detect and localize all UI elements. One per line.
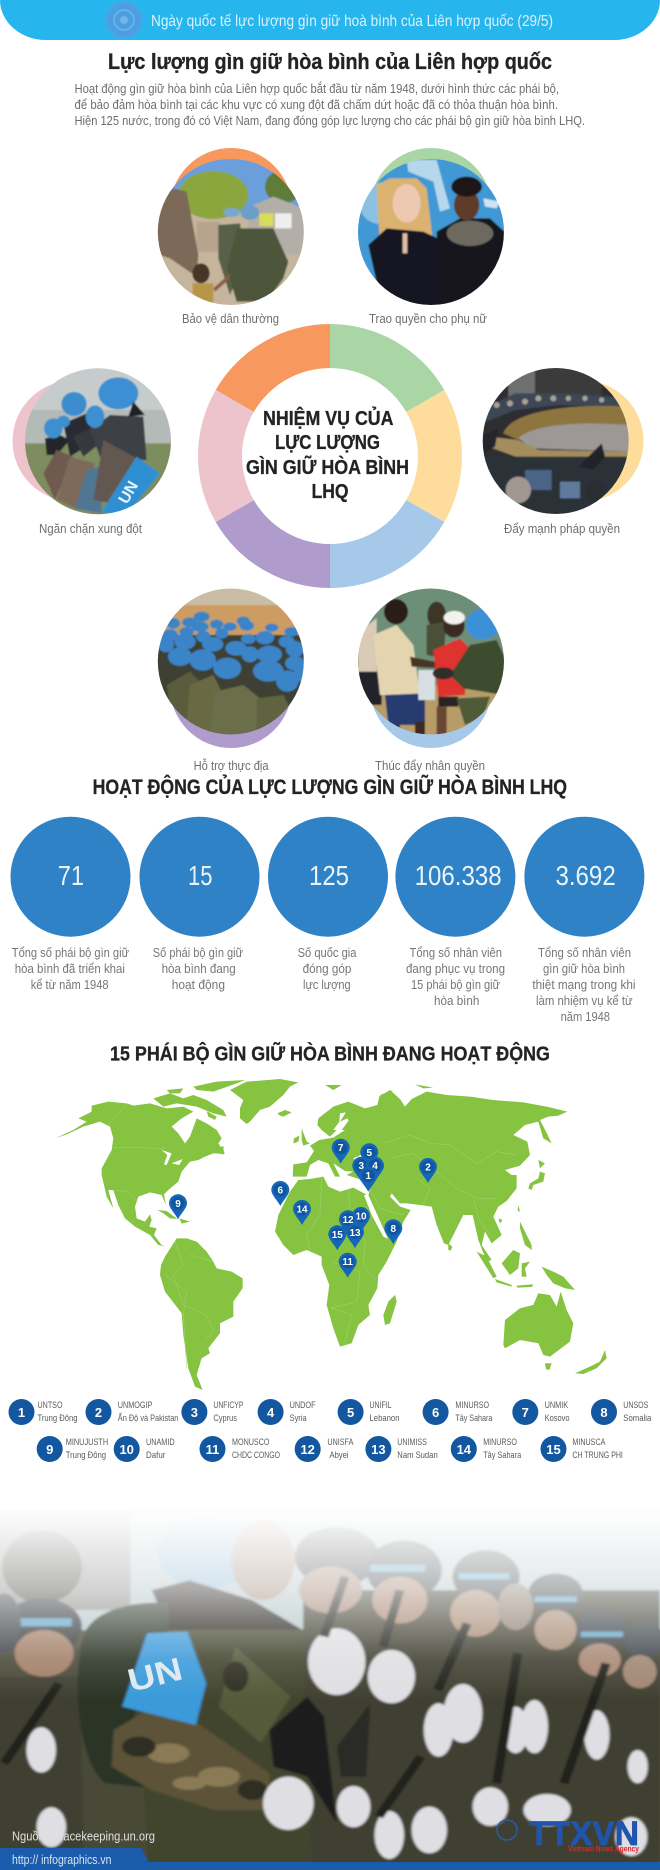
- stat: 3.692 fallen: làm nhiệm vụ kể từ: [536, 993, 633, 1008]
- photo: empower women: [358, 148, 504, 326]
- pin 15: [328, 1225, 346, 1250]
- intro text: [74, 81, 585, 128]
- pin 2: 2: [425, 1162, 431, 1174]
- legend item 13: UNIMISS: [397, 1437, 427, 1448]
- legend item 13: [365, 1436, 438, 1462]
- pin 5: 5: [367, 1148, 373, 1159]
- stat: 106.338 staff: Tổng số nhân viên: [410, 945, 502, 960]
- pin 3: [352, 1157, 370, 1182]
- legend item 5: [338, 1399, 400, 1425]
- legend item 3: [181, 1399, 243, 1425]
- pin 10: 10: [355, 1212, 367, 1222]
- white fade over photo: [0, 1495, 660, 1705]
- pin 1: [359, 1167, 377, 1192]
- legend item 15: MINUSCA: [572, 1437, 606, 1448]
- stat: 71 missions: Tổng số phái bộ gìn giữ: [12, 945, 129, 960]
- legend item 2: 2: [95, 1405, 102, 1420]
- stat: 15 active: hoạt động: [172, 977, 225, 992]
- caption: Hỗ trợ thực địa: [194, 758, 269, 773]
- pin 3: 3: [359, 1161, 365, 1172]
- map pins: [169, 1139, 437, 1278]
- legend item 8: UNSOS: [623, 1400, 648, 1411]
- legend item 13: 13: [371, 1442, 386, 1457]
- footer bar: [0, 1848, 660, 1870]
- stat: 15 active: hòa bình đang: [162, 961, 236, 976]
- legend item 3: 3: [191, 1405, 198, 1420]
- pin 14: 14: [296, 1204, 308, 1216]
- legend item 6: MINURSO: [455, 1400, 489, 1411]
- stat: 106.338 staff: 106.338: [415, 860, 502, 891]
- heading: activities: HOẠT ĐỘNG CỦA LỰC LƯỢNG GÌN GIỮ HÒA BÌNH LHQ: [93, 775, 567, 799]
- legend item 7: 7: [522, 1405, 529, 1420]
- legend item 8: 8: [600, 1405, 608, 1420]
- legend item 9: MINUJUSTH: [66, 1437, 108, 1448]
- world map: [55, 1079, 607, 1390]
- pin 6: 6: [278, 1186, 284, 1196]
- pin 7: 7: [338, 1143, 344, 1154]
- pin 14: [293, 1200, 311, 1225]
- pin 5: [360, 1143, 378, 1168]
- pin 8: 8: [391, 1224, 397, 1235]
- pin 8: [384, 1219, 402, 1244]
- logo: TTXVN: TTXVN: [529, 1815, 639, 1853]
- stat: 15 active: 15: [188, 860, 212, 891]
- photo: rule of law: [475, 360, 644, 536]
- stat: 125 countries: đóng góp: [303, 961, 351, 976]
- legend item 10: [114, 1436, 175, 1462]
- stat: 3.692 fallen: gìn giữ hòa bình: [543, 961, 625, 976]
- legend item 7: UNMIK: [545, 1400, 569, 1411]
- legend item 11: MONUSCO: [232, 1437, 270, 1448]
- photo: prevent conflict: UN: [116, 478, 142, 507]
- header banner: [0, 0, 660, 40]
- intro text: Hiện 125 nước, trong đó có Việt Nam, đang đóng góp lực lượng cho các phái bộ gìn giữ hòa bình LHQ.: [74, 113, 585, 128]
- legend item 5: UNIFIL: [370, 1400, 392, 1411]
- stat: 71 missions: hòa bình đã triển khai: [15, 961, 125, 976]
- stat: 125 countries: Số quốc gia: [298, 945, 357, 960]
- legend item 5: 5: [347, 1405, 354, 1420]
- donut centre text: LỰC LƯỢNG: [275, 432, 380, 454]
- stat: 106.338 staff: đang phục vụ trong: [406, 961, 505, 976]
- legend item 4: [258, 1399, 316, 1425]
- legend item 15: [540, 1436, 623, 1462]
- pin 15: 15: [332, 1230, 343, 1241]
- photo: marching peacekeepers: [0, 1495, 660, 1870]
- photo: prevent conflict: [12, 360, 180, 536]
- legend item 12: Abyei: [330, 1450, 348, 1461]
- stat: 71 missions: 71: [58, 860, 84, 891]
- legend item 2: [86, 1399, 178, 1425]
- source text: Nguồn: peacekeeping.un.org: [12, 1829, 155, 1844]
- stat: 125 countries: 125: [309, 860, 349, 891]
- pin 12: 12: [342, 1215, 354, 1226]
- legend item 13: Nam Sudan: [397, 1450, 438, 1461]
- legend item 6: [423, 1399, 493, 1425]
- legend item 12: 12: [300, 1442, 315, 1457]
- donut centre text: LHQ: [312, 481, 348, 503]
- pin 7: [332, 1139, 350, 1164]
- legend item 15: 15: [546, 1442, 561, 1457]
- pin 13: 13: [349, 1228, 361, 1239]
- caption: Đẩy mạnh pháp quyền: [504, 521, 620, 536]
- title: Lực lượng gìn giữ hòa bình của Liên hợp quốc: [108, 49, 552, 74]
- legend item 1: [8, 1399, 78, 1425]
- legend item 2: Ấn Độ và Pakistan: [118, 1413, 178, 1424]
- legend item 7: Kosovo: [545, 1413, 570, 1424]
- legend item 6: 6: [432, 1405, 439, 1420]
- pin 4: 4: [372, 1161, 378, 1172]
- legend item 8: Somalia: [623, 1413, 652, 1424]
- heading: 15 missions: 15 PHÁI BỘ GÌN GIỮ HÒA BÌNH ĐANG HOẠT ĐỘNG: [110, 1042, 550, 1066]
- stat: 15 active: Số phái bộ gìn giữ: [153, 945, 243, 960]
- stat: 3.692 fallen: thiệt mạng trong khi: [532, 977, 636, 992]
- pin 11: 11: [342, 1257, 353, 1268]
- stat: 125 countries: lực lượng: [303, 977, 351, 992]
- legend item 10: Dafur: [146, 1450, 165, 1461]
- pin 9: [169, 1194, 187, 1219]
- stat: 3.692 fallen: 3.692: [556, 860, 616, 891]
- stat: 3.692 fallen: Tổng số nhân viên: [538, 945, 631, 960]
- legend item 1: 1: [18, 1405, 25, 1420]
- legend item 4: Syria: [290, 1413, 307, 1424]
- photo: protect civilians: [158, 148, 304, 326]
- legend item 1: Trung Đông: [38, 1413, 78, 1424]
- legend item 11: CHDC CONGO: [232, 1450, 280, 1461]
- stat: 71 missions: kể từ năm 1948: [31, 977, 109, 992]
- legend item 2: UNMOGIP: [118, 1400, 152, 1411]
- legend: missions: [8, 1399, 652, 1462]
- donut chart: [198, 324, 462, 588]
- legend item 9: Trung Đông: [66, 1450, 106, 1461]
- footer url: http:// infographics.vn: [12, 1853, 112, 1867]
- intro text: Hoạt động gìn giữ hòa bình của Liên hợp quốc bắt đầu từ năm 1948, dưới hình thức các phái bộ,: [74, 81, 559, 96]
- header text: Ngày quốc tế lực lượng gìn giữ hoà bình của Liên hợp quốc (29/5): [151, 13, 553, 30]
- legend item 12: UNISFA: [327, 1437, 354, 1448]
- legend item 10: UNAMID: [146, 1437, 175, 1448]
- legend item 1: UNTSO: [38, 1400, 62, 1411]
- legend item 3: UNFICYP: [213, 1400, 243, 1411]
- armband lettering: UN: [124, 1651, 186, 1699]
- pin 4: [366, 1157, 384, 1182]
- legend item 5: Lebanon: [370, 1413, 400, 1424]
- legend item 14: 14: [457, 1442, 472, 1457]
- icon: UN emblem: [106, 2, 142, 38]
- pin 10: [352, 1207, 370, 1232]
- stat: 3.692 fallen: năm 1948: [561, 1009, 610, 1024]
- americas and greenland: [55, 1079, 298, 1390]
- photo: promote human rights: [358, 588, 504, 772]
- panel: missions donut and photos: [12, 145, 644, 773]
- caption: Ngăn chặn xung đột: [39, 521, 142, 536]
- pin 6: [271, 1181, 289, 1206]
- legend item 10: 10: [119, 1442, 134, 1457]
- legend item 8: [591, 1399, 652, 1425]
- legend item 15: CH TRUNG PHI: [572, 1450, 623, 1461]
- caption: Trao quyền cho phụ nữ: [369, 311, 487, 326]
- pin 12: [339, 1210, 357, 1235]
- photo: field support: [158, 588, 304, 772]
- intro text: để bảo đảm hòa bình tại các khu vực có xung đột đã chấm dứt hoặc đã có thỏa thuận hòa bình.: [74, 97, 558, 112]
- donut centre text: [246, 406, 409, 503]
- logo: TTXVN: Vietnam News Agency: [568, 1844, 639, 1854]
- panel: statistics: [10, 817, 644, 1024]
- legend item 12: [295, 1436, 354, 1462]
- stat: 15 active: [140, 817, 260, 992]
- legend item 14: Tây Sahara: [483, 1450, 522, 1461]
- legend item 4: UNDOF: [290, 1400, 316, 1411]
- stat: 106.338 staff: hòa bình: [434, 993, 479, 1008]
- legend item 9: 9: [46, 1442, 53, 1457]
- donut centre text: NHIỆM VỤ CỦA: [263, 406, 394, 430]
- stat: 106.338 staff: 15 phái bộ gìn giữ: [411, 977, 500, 992]
- eurasia, africa and oceania: [275, 1084, 607, 1374]
- legend item 11: [200, 1436, 280, 1462]
- legend item 6: Tây Sahara: [455, 1413, 493, 1424]
- stat: 71 missions: [10, 817, 130, 992]
- pin 13: [346, 1223, 364, 1248]
- legend item 9: [37, 1436, 108, 1462]
- stat: 125 countries: [268, 817, 388, 992]
- stat: 3.692 fallen: [524, 817, 644, 1024]
- legend item 4: 4: [267, 1405, 275, 1420]
- caption: Thúc đẩy nhân quyền: [375, 758, 485, 773]
- legend item 14: MINURSO: [483, 1437, 517, 1448]
- pin 11: [339, 1253, 357, 1278]
- legend item 14: [451, 1436, 522, 1462]
- pin 9: 9: [175, 1199, 181, 1210]
- stat: 106.338 staff: [395, 817, 515, 1008]
- donut centre text: GÌN GIỮ HÒA BÌNH: [246, 455, 409, 479]
- legend item 3: Cyprus: [213, 1413, 237, 1424]
- caption: Bảo vệ dân thường: [182, 311, 279, 326]
- legend item 11: 11: [206, 1442, 219, 1457]
- legend item 7: [512, 1399, 570, 1425]
- pin 1: 1: [366, 1171, 372, 1182]
- pin 2: [419, 1158, 437, 1183]
